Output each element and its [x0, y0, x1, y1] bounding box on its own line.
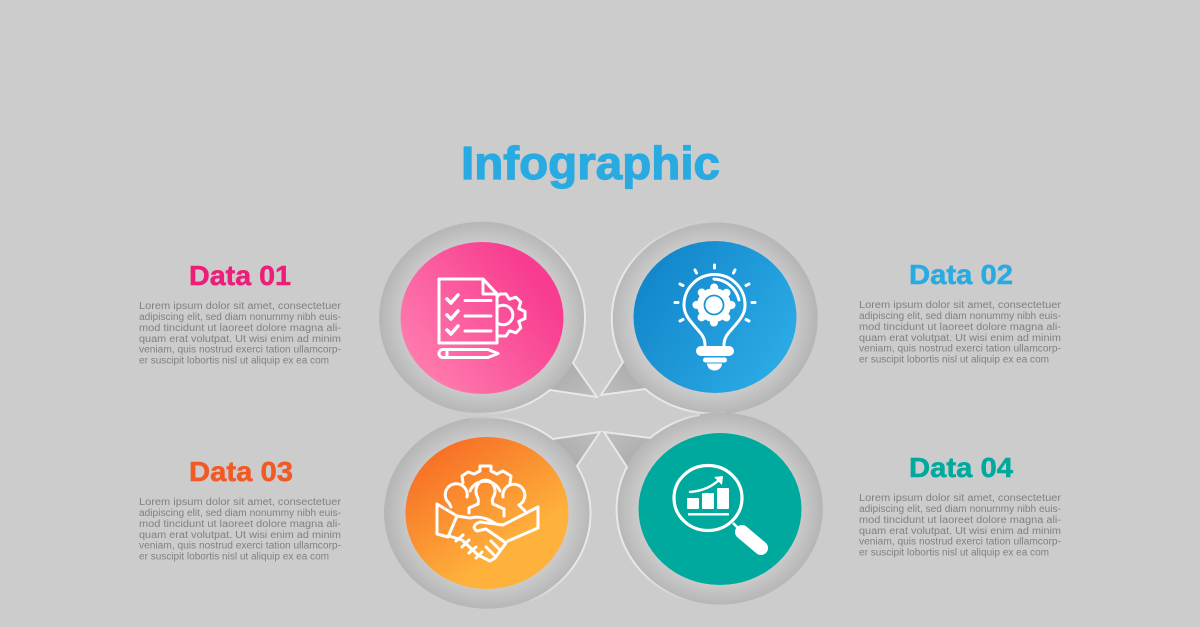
text block: Data 03: veniam, quis nostrud exerci tation ullamcorp-: [139, 540, 341, 552]
text block: Data 04: quam erat volutpat. Ut wisi enim ad minim: [859, 526, 1061, 537]
title: Infographic: [461, 137, 720, 189]
text block: Data 03: mod tincidunt ut laoreet dolore magna ali-: [139, 519, 341, 530]
text block: Data 04: adipiscing elit, sed diam nonummy nibh euis-: [859, 504, 1061, 515]
panel: bubble 1 pink: [379, 222, 597, 414]
text block: Data 02: veniam, quis nostrud exerci tation ullamcorp-: [859, 344, 1061, 354]
text block: Data 02: Data 02: [909, 259, 1013, 290]
text block: Data 04: veniam, quis nostrud exerci tation ullamcorp-: [859, 536, 1061, 548]
text block: Data 02: [859, 259, 1062, 366]
text block: Data 04: mod tincidunt ut laoreet dolore magna ali-: [859, 515, 1061, 526]
text block: Data 02: quam erat volutpat. Ut wisi enim ad minim: [859, 333, 1061, 344]
panel: bubble 2 blue: [601, 222, 818, 414]
text block: Data 01: Data 01: [189, 260, 291, 291]
text block: Data 04: Lorem ipsum dolor sit amet, consectetuer: [859, 493, 1062, 504]
text block: Data 03: adipiscing elit, sed diam nonummy nibh euis-: [139, 508, 341, 519]
text block: Data 04: er suscipit lobortis nisl ut aliquip ex ea com: [859, 548, 1049, 558]
text block: Data 02: er suscipit lobortis nisl ut aliquip ex ea com: [859, 354, 1049, 366]
icon: light bulb with gear: [675, 265, 755, 370]
text block: Data 04: Data 04: [909, 452, 1013, 483]
text block: Data 03: Lorem ipsum dolor sit amet, consectetuer: [139, 497, 342, 508]
text block: Data 01: veniam, quis nostrud exerci tation ullamcorp-: [139, 344, 341, 356]
text block: Data 01: quam erat volutpat. Ut wisi enim ad minim: [139, 334, 341, 345]
text block: Data 03: quam erat volutpat. Ut wisi enim ad minim: [139, 530, 341, 541]
text block: Data 03: er suscipit lobortis nisl ut aliquip ex ea com: [139, 552, 329, 562]
text block: Data 01: [139, 260, 342, 366]
text block: Data 01: Lorem ipsum dolor sit amet, consectetuer: [139, 301, 342, 312]
text block: Data 02: mod tincidunt ut laoreet dolore magna ali-: [859, 322, 1061, 333]
text block: Data 01: mod tincidunt ut laoreet dolore magna ali-: [139, 323, 341, 334]
text block: Data 03: [139, 456, 342, 562]
icon: checklist with gear and pencil: [439, 279, 525, 358]
text block: Data 01: er suscipit lobortis nisl ut aliquip ex ea com: [139, 356, 329, 366]
text block: Data 03: Data 03: [189, 456, 293, 487]
panel: bubble 3 orange: [384, 417, 600, 609]
panel: bubble 4 teal: [604, 413, 823, 605]
text block: Data 04: [859, 452, 1062, 558]
text block: Data 02: Lorem ipsum dolor sit amet, consectetuer: [859, 300, 1062, 311]
icon: magnifier with bar chart: [674, 466, 761, 548]
text block: Data 01: adipiscing elit, sed diam nonummy nibh euis-: [139, 312, 341, 323]
icon: team gear handshake: [437, 466, 538, 561]
text block: Data 02: adipiscing elit, sed diam nonummy nibh euis-: [859, 311, 1061, 322]
